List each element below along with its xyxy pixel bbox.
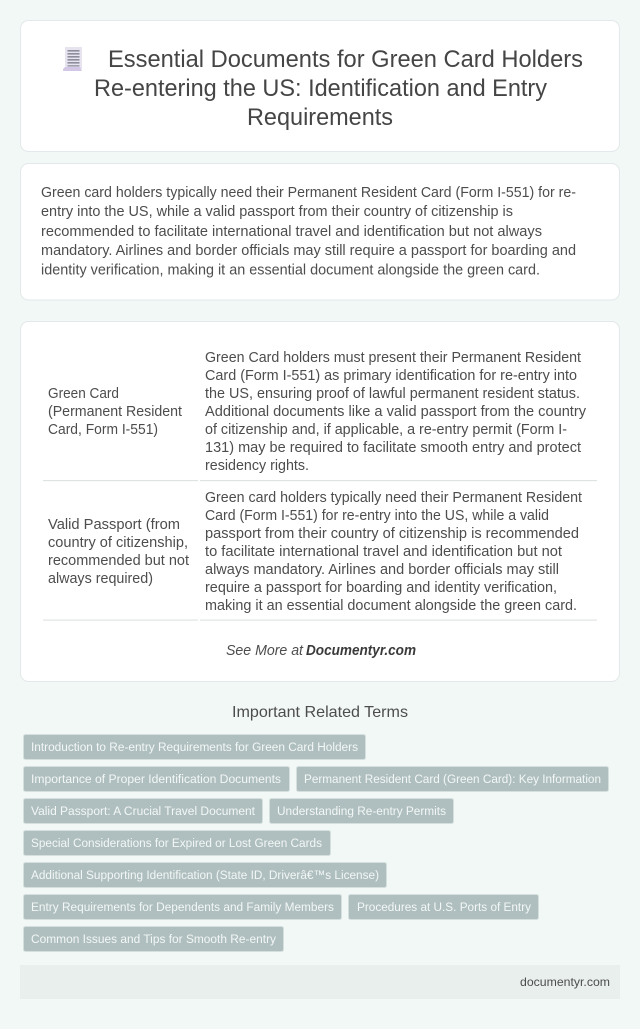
summary text: [41, 185, 576, 278]
title: Requirements: [247, 104, 393, 131]
table row: valid passport: [48, 490, 582, 614]
summary text: Green card holders typically need their Permanent Resident Card (Form I-551) for re-: [41, 185, 576, 201]
tag: [24, 766, 290, 792]
row description: valid passport: to facilitate international travel and identification but not: [205, 544, 562, 560]
icon: document scroll: [63, 47, 82, 71]
tag: Introduction to Re-entry Requirements for Green Card Holders: [31, 740, 358, 754]
tag: [24, 894, 342, 920]
row label: green card: (Permanent Resident: [48, 404, 182, 420]
heading: important related terms: Important Related Terms: [232, 704, 408, 721]
panel: document table: [20, 322, 620, 682]
tag: [24, 926, 284, 952]
summary text: recommended to facilitate international travel and identification but not always: [41, 224, 542, 240]
row description: valid passport: require a passport for boarding and identity verification,: [205, 580, 557, 596]
row description: green card: the US, ensuring proof of lawful permanent resident status.: [205, 386, 580, 402]
tag: Permanent Resident Card (Green Card): Key Information: [304, 772, 601, 786]
row description: green card: residency rights.: [205, 458, 309, 474]
tag: Valid Passport: A Crucial Travel Document: [31, 804, 256, 818]
row description: valid passport: Card (Form I-551) for re-entry into the US, while a valid: [205, 508, 549, 524]
footer bar: documentyr.com: [520, 975, 610, 989]
summary text: entry into the US, while a valid passport from their country of citizenship is: [41, 204, 513, 220]
see more link: [226, 643, 416, 659]
row label: valid passport: recommended but not: [48, 553, 189, 569]
row description: green card: 131) may be required to facilitate smooth entry and protect: [205, 440, 581, 456]
title: [94, 46, 583, 131]
see more link: See More at: [226, 643, 304, 659]
summary text: mandatory. Airlines and border officials may still require a passport for boarding and: [41, 243, 576, 259]
tag: Importance of Proper Identification Documents: [31, 772, 281, 786]
related terms tags: [24, 734, 608, 952]
tag: Additional Supporting Identification (State ID, Driverâ€™s License): [31, 868, 379, 882]
row description: valid passport: making it an essential document alongside the green card.: [205, 598, 577, 614]
row description: valid passport: [205, 490, 582, 614]
row label: valid passport: always required): [48, 571, 153, 587]
tag: [24, 862, 386, 888]
tag: [270, 798, 454, 824]
tag: Procedures at U.S. Ports of Entry: [357, 900, 532, 914]
tag: [348, 894, 538, 920]
see more link: Documentyr.com: [306, 643, 416, 659]
title: Essential Documents for Green Card Holders: [108, 46, 583, 73]
tag: Special Considerations for Expired or Lost Green Cards: [31, 836, 322, 850]
row label: valid passport: [48, 517, 189, 587]
panel: summary paragraph: [20, 164, 620, 300]
row description: valid passport: Green card holders typically need their Permanent Resident: [205, 490, 582, 506]
title: Re-entering the US: Identification and Entry: [94, 75, 547, 102]
row label: green card: [48, 386, 182, 438]
row label: green card: Card, Form I-551): [48, 422, 158, 438]
tag: [24, 798, 262, 824]
tag: Understanding Re-entry Permits: [277, 804, 446, 818]
tag: [296, 766, 608, 792]
row description: green card: Additional documents like a valid passport from the country: [205, 404, 587, 420]
row label: valid passport: Valid Passport (from: [48, 517, 180, 533]
tag: Common Issues and Tips for Smooth Re-entry: [31, 932, 277, 946]
row description: green card: [205, 350, 587, 474]
row description: valid passport: passport from their country of citizenship is recommended: [205, 526, 579, 542]
row description: green card: Green Card holders must present their Permanent Resident: [205, 350, 581, 366]
row label: valid passport: country of citizenship,: [48, 535, 188, 551]
tag: [24, 830, 330, 856]
row description: green card: of citizenship and, if applicable, a re-entry permit (Form I-: [205, 422, 567, 438]
footer bar: [20, 965, 620, 999]
summary text: identity verification, making it an essential document alongside the green card.: [41, 262, 540, 278]
row label: green card: Green Card: [48, 386, 119, 402]
row description: green card: Card (Form I-551) as primary identification for re-entry into: [205, 368, 577, 384]
panel: title header: [20, 20, 620, 152]
table row: green card: [48, 350, 587, 474]
tag: Entry Requirements for Dependents and Family Members: [31, 900, 334, 914]
tag: [24, 734, 366, 760]
row description: valid passport: always mandatory. Airlines and border officials may still: [205, 562, 559, 578]
